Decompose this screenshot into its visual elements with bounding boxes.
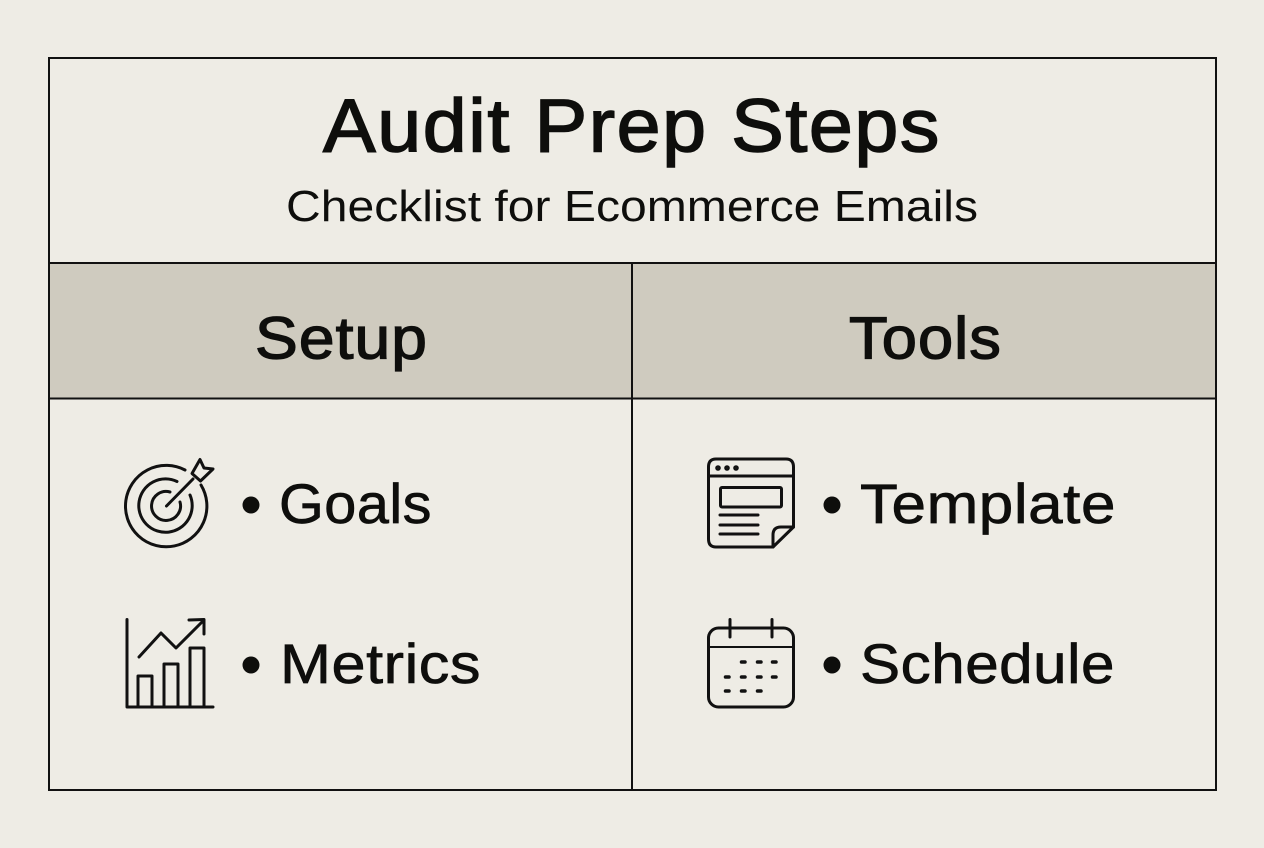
panel: checklist table xyxy=(49,58,1216,790)
heading: Tools: Tools xyxy=(849,306,1002,372)
bullet and label: Goals: Goals xyxy=(279,472,432,535)
icon: target with arrow xyxy=(125,460,213,547)
bullet and label: Metrics: Metrics xyxy=(280,632,481,695)
subtitle: Checklist for Ecommerce Emails xyxy=(286,182,978,231)
icon: bar chart with rising arrow xyxy=(127,620,213,707)
panel: column header band xyxy=(49,263,1216,398)
title: Audit Prep Steps xyxy=(323,84,941,168)
bullet and label: Schedule: Schedule xyxy=(860,632,1115,695)
icon: calendar xyxy=(708,620,794,707)
heading: Setup: Setup xyxy=(255,306,428,372)
bullet and label: Template: Template xyxy=(860,472,1116,535)
icon: email template page xyxy=(708,459,794,547)
